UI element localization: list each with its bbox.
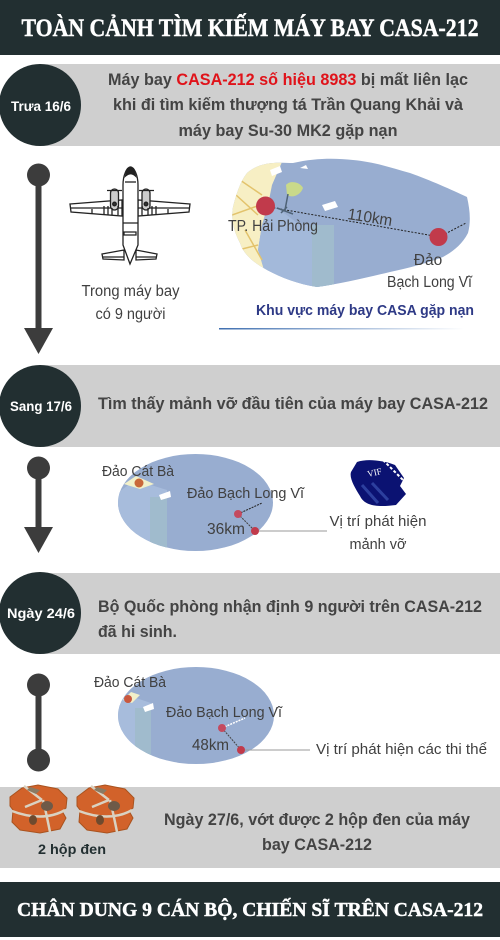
map: Hai Phong to Bach Long Vi: Bạch Long Vĩ [387, 274, 473, 291]
panel: noon 16/6 header: Trưa 16/6 [11, 98, 71, 114]
icon: debris fragment [351, 460, 406, 506]
timeline 3 [27, 674, 50, 772]
map: Hai Phong to Bach Long Vi [225, 155, 473, 291]
panel: black boxes: bay CASA-212 [262, 836, 372, 854]
map: debris location: Đảo Bạch Long Vĩ [187, 485, 305, 502]
footer bar: CHÂN DUNG 9 CÁN BỘ, CHIẾN SĨ TRÊN CASA-212 [17, 897, 483, 921]
map: bodies location: Đảo Bạch Long Vĩ [166, 704, 283, 721]
footer bar [0, 882, 500, 937]
map: bodies location [94, 667, 310, 770]
text: bodies caption: Vị trí phát hiện các thi thể [316, 741, 487, 758]
panel: black boxes: 2 hộp đen [38, 841, 106, 857]
map: bodies location: Đảo Cát Bà [94, 674, 167, 691]
arrow: timeline 2 [24, 456, 53, 553]
panel: 24/6 header: đã hi sinh. [98, 623, 177, 641]
panel: black boxes: Ngày 27/6, vớt được 2 hộp đen của máy [164, 811, 471, 829]
map: Hai Phong to Bach Long Vi: 110km [346, 206, 393, 230]
title bar [0, 0, 500, 55]
icon: black box 1 [10, 785, 67, 833]
text: plane caption: Trong máy bay [82, 283, 180, 300]
map caption: Khu vực máy bay CASA gặp nạn [256, 303, 474, 319]
arrow: timeline 1 [24, 164, 53, 354]
panel: morning 17/6 header: Sang 17/6 [10, 398, 72, 414]
panel: noon 16/6 header [0, 64, 500, 146]
panel: 24/6 header [0, 572, 500, 654]
panel: morning 17/6 header: Tìm thấy mảnh vỡ đầu tiên của máy bay CASA-212 [98, 395, 488, 413]
icon: debris fragment: VIF [366, 466, 383, 479]
map: debris location [102, 454, 327, 555]
panel: morning 17/6 header [0, 365, 500, 447]
icon: black box 2 [77, 785, 134, 833]
panel: black boxes [0, 787, 500, 868]
panel: noon 16/6 header: Máy bay CASA-212 số hiệu 8983 bị mất liên lạc [108, 71, 468, 89]
panel: 24/6 header: Ngày 24/6 [7, 605, 75, 621]
text: debris caption: Vị trí phát hiện [330, 513, 426, 530]
text: plane caption: có 9 người [96, 306, 166, 323]
text: plane caption [82, 283, 180, 323]
text: debris caption: mảnh vỡ [350, 536, 407, 553]
panel: noon 16/6 header: máy bay Su-30 MK2 gặp nạn [178, 122, 398, 140]
text: debris caption [330, 513, 426, 553]
map: bodies location: 48km [192, 737, 229, 754]
map: debris location: 36km [207, 521, 245, 538]
panel: 24/6 header: Bộ Quốc phòng nhận định 9 người trên CASA-212 [98, 598, 482, 616]
map: debris location: Đảo Cát Bà [102, 463, 175, 480]
panel: noon 16/6 header: khi đi tìm kiếm thượng tá Trần Quang Khải và [113, 96, 464, 114]
icon: plane [70, 167, 190, 264]
map: Hai Phong to Bach Long Vi: TP. Hải Phòng [228, 218, 318, 235]
map: Hai Phong to Bach Long Vi: Đảo [414, 252, 442, 269]
